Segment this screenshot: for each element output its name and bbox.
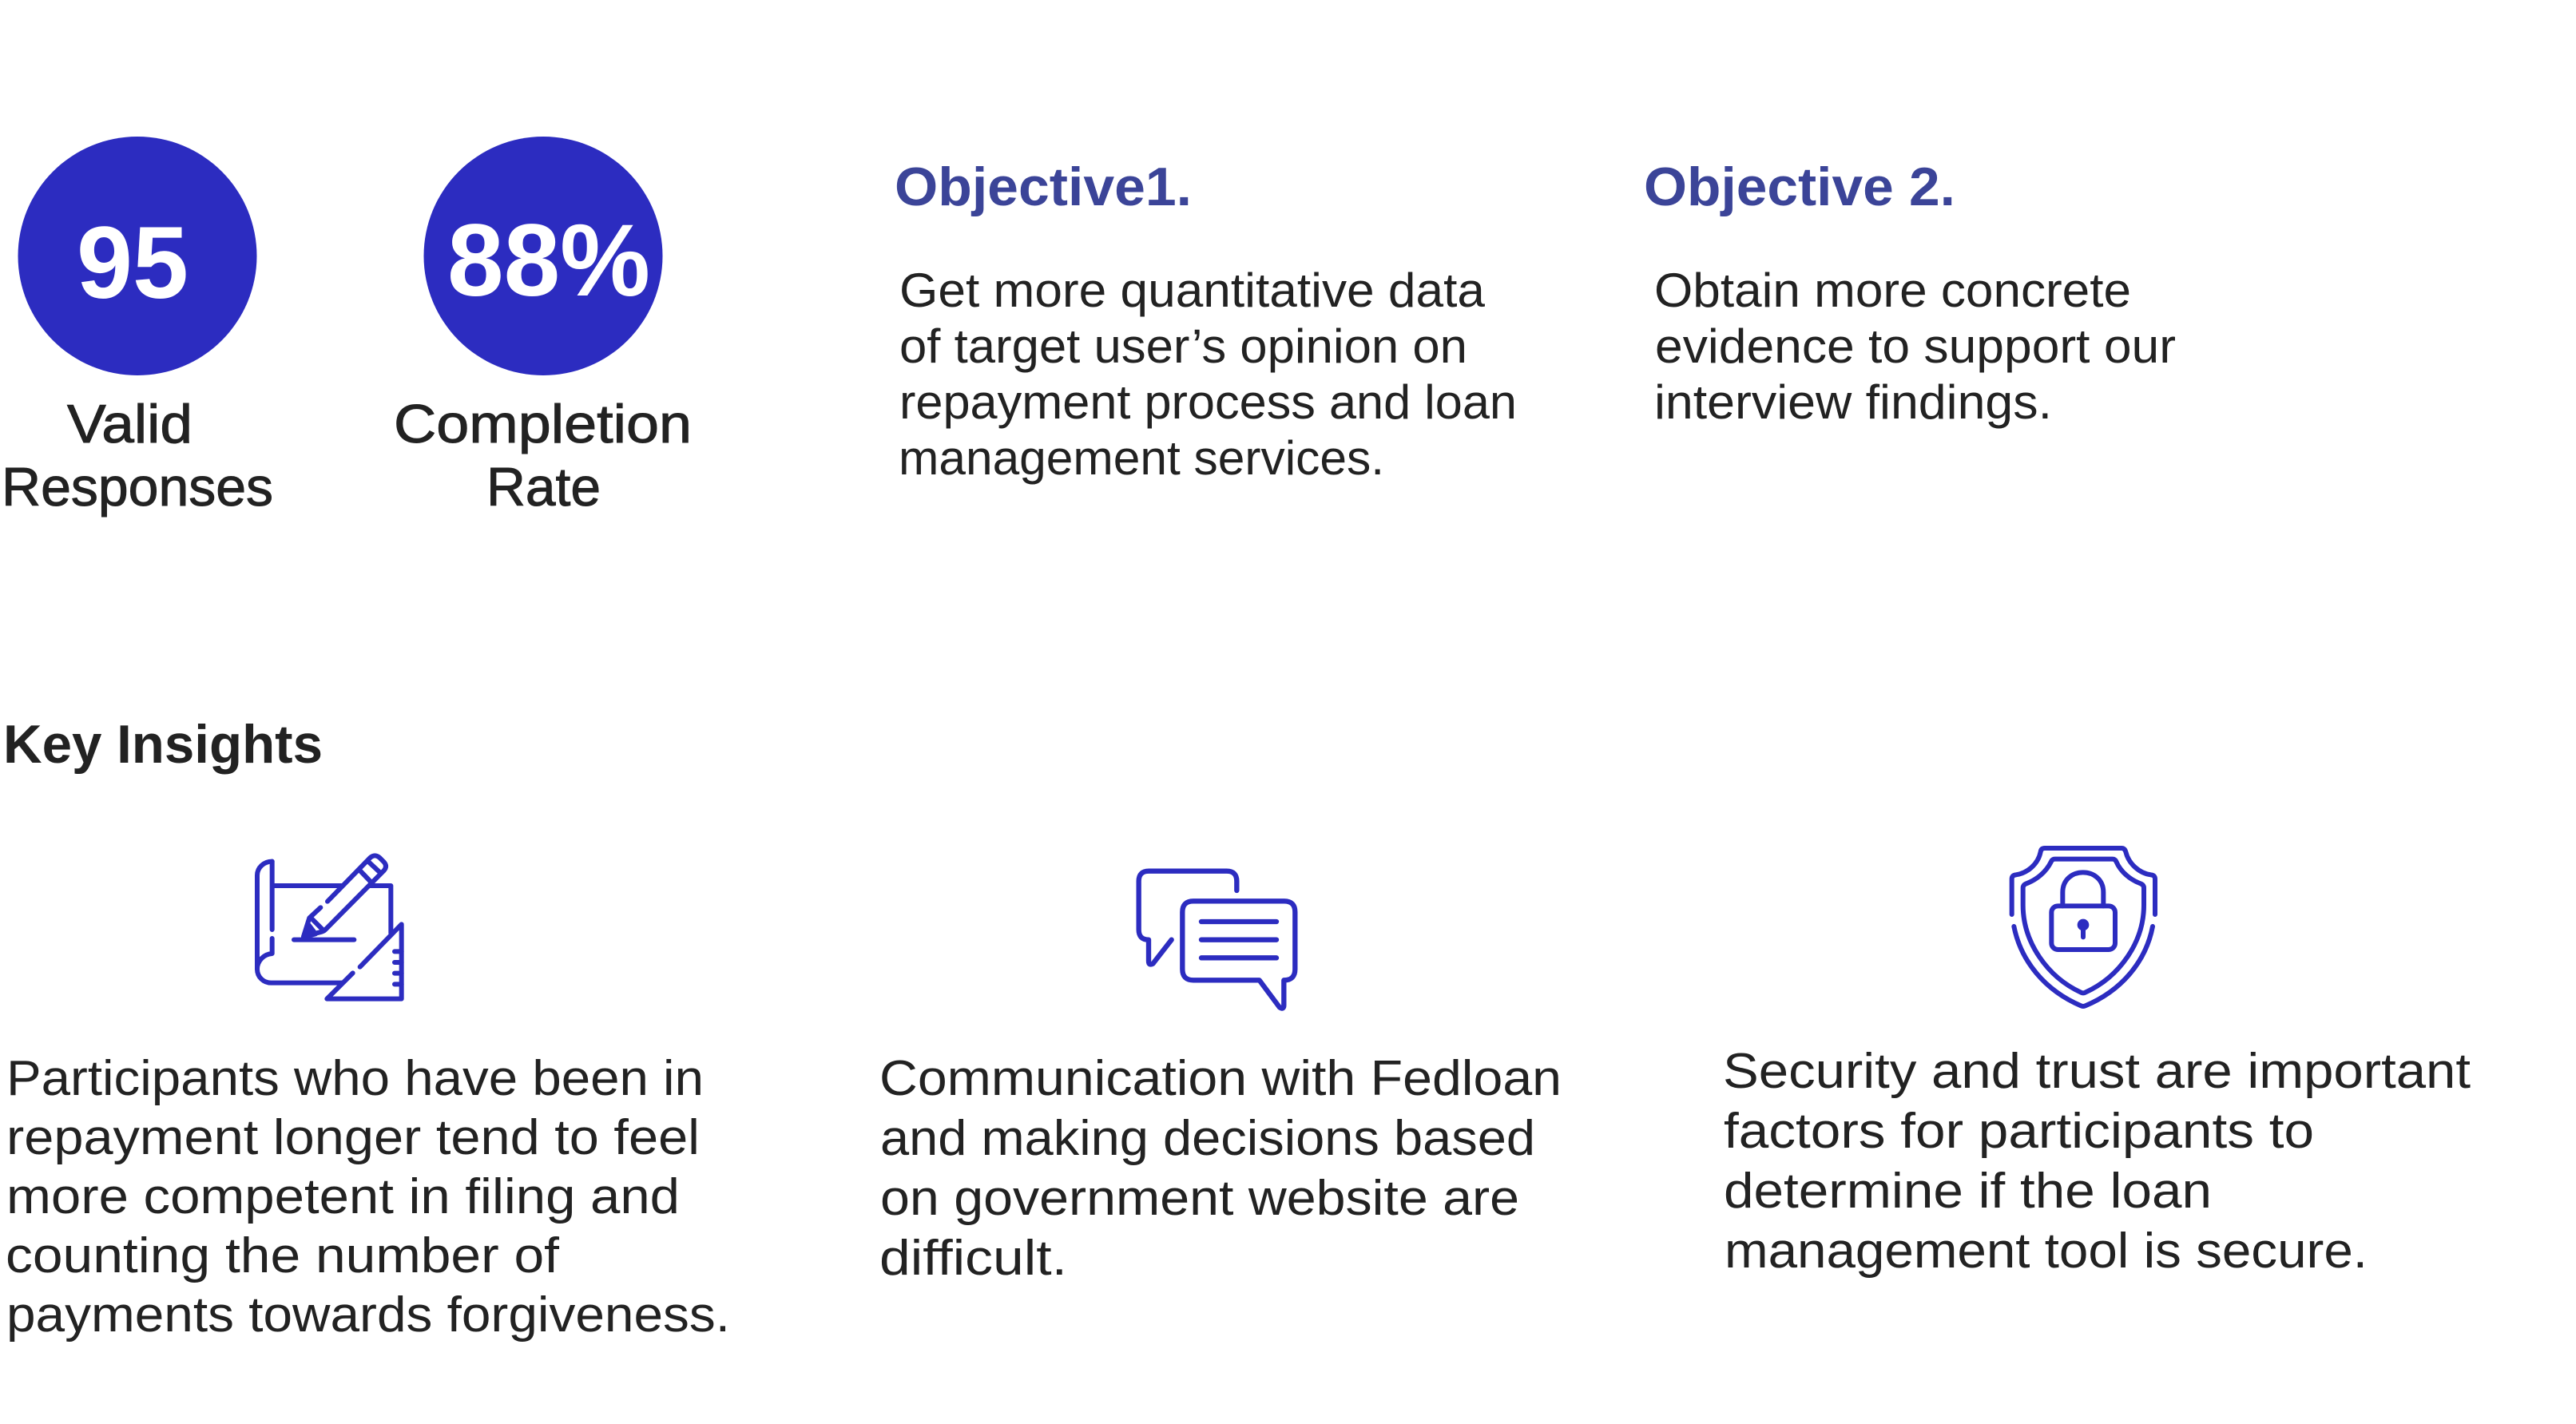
stat circle: 88% xyxy=(423,137,663,375)
text: insight 1: more competent in filing and xyxy=(6,1169,680,1224)
label: completion rate: Completion xyxy=(394,394,692,454)
text: insight 2: difficult. xyxy=(879,1231,1067,1286)
icon: speech bubbles xyxy=(1139,871,1295,1009)
stat: valid responses xyxy=(2,137,273,518)
text: insight 2 xyxy=(879,1051,1562,1286)
text: insight 3 xyxy=(1723,1044,2471,1279)
panel: insight 2 xyxy=(879,871,1562,1286)
panel: objective 2 xyxy=(1644,157,2176,429)
text: insight 3: factors for participants to xyxy=(1724,1104,2314,1159)
text: objective 2 description: Obtain more concrete xyxy=(1654,264,2131,317)
text: insight 1: payments towards forgiveness. xyxy=(6,1287,730,1343)
panel: insight 1 xyxy=(6,855,730,1343)
text: objective 1 description: of target user’s opinion on xyxy=(899,319,1467,373)
text: insight 3: determine if the loan xyxy=(1724,1164,2212,1219)
panel: objective 1 xyxy=(895,157,1517,485)
text: objective 1 description: Get more quantitative data xyxy=(899,264,1486,317)
label: valid responses xyxy=(2,394,273,518)
text: insight 1 xyxy=(6,1051,730,1343)
stat: completion rate xyxy=(394,137,692,518)
text: insight 2: Communication with Fedloan xyxy=(879,1051,1562,1106)
heading: objective 1: Objective1. xyxy=(895,157,1192,217)
text: objective 2 description: evidence to support our xyxy=(1655,319,2176,373)
text: insight 1: repayment longer tend to feel xyxy=(6,1110,700,1165)
heading: objective 2: Objective 2. xyxy=(1644,157,1955,217)
text: objective 2 description xyxy=(1654,264,2176,429)
heading: key insights: Key Insights xyxy=(3,714,323,775)
value: 95: 95 xyxy=(77,206,189,320)
icon: blueprint with pencil and set square xyxy=(257,855,402,999)
value: 88%: 88% xyxy=(447,204,650,318)
panel: insight 3 xyxy=(1723,848,2471,1279)
label: completion rate: Rate xyxy=(486,457,601,518)
text: objective 2 description: interview findings. xyxy=(1654,375,2052,429)
text: insight 3: management tool is secure. xyxy=(1725,1224,2368,1279)
text: insight 1: counting the number of xyxy=(6,1228,560,1283)
label: valid responses: Valid xyxy=(67,394,193,454)
text: objective 1 description xyxy=(899,264,1517,485)
label: completion rate xyxy=(394,394,692,518)
text: objective 1 description: management services. xyxy=(899,431,1384,485)
icon: shield with padlock xyxy=(2012,848,2155,1006)
text: insight 2: and making decisions based xyxy=(880,1111,1535,1166)
text: insight 1: Participants who have been in xyxy=(6,1051,704,1106)
label: valid responses: Responses xyxy=(2,457,273,518)
text: objective 1 description: repayment process and loan xyxy=(899,375,1517,429)
stat circle: 95 xyxy=(18,137,257,375)
text: insight 2: on government website are xyxy=(880,1171,1519,1226)
text: insight 3: Security and trust are important xyxy=(1723,1044,2471,1099)
